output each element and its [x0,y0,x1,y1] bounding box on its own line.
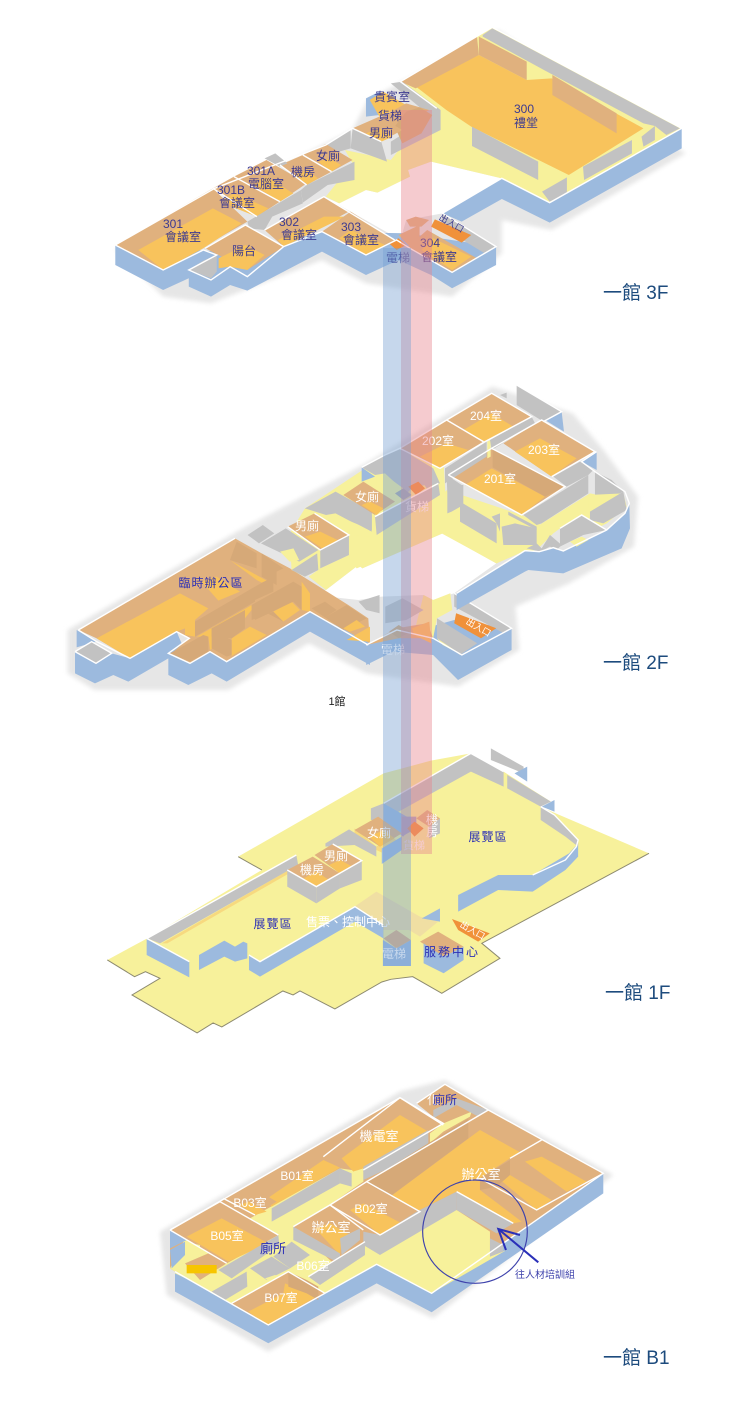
labels: 1F rooms: 機 [426,812,438,827]
labels: 1F rooms: 服務中心 [424,944,480,959]
labels: B1 rooms: 機電室 [359,1129,399,1144]
labels: 3F rooms: 貨梯 [378,109,402,123]
labels: 3F rooms: 電腦室 [248,176,284,191]
labels: B1 rooms: 化 [427,1093,439,1107]
labels: 3F rooms: 會議室 [343,232,379,247]
labels: 2F rooms: 貨梯 [405,500,429,514]
labels: B1 rooms: B06室 [296,1258,330,1273]
arrow to training group [498,1229,538,1262]
labels: 3F rooms: 電梯 [386,251,410,265]
labels: 3F rooms: 禮堂 [514,116,538,130]
floor plan: B1 [160,1080,613,1352]
labels: B1 rooms: B02室 [354,1201,388,1216]
heading: 一館 B1: 一館 B1 [603,1347,670,1369]
labels: 2F rooms: 臨時辦公區 [178,576,244,590]
labels: 1F rooms: 男廁 [324,848,348,863]
labels: 3F rooms: 陽台 [232,243,256,258]
labels: 3F rooms: 會議室 [219,195,255,210]
labels: 3F rooms: 301 [163,217,183,231]
labels: 2F rooms: 1館 [328,694,346,708]
labels: 3F rooms: 機房 [291,164,315,179]
labels: 3F rooms: 會議室 [281,227,317,242]
labels: 2F rooms: 201室 [484,471,516,486]
labels: 2F rooms: 電梯 [381,643,405,657]
labels: 3F rooms: 會議室 [421,249,457,264]
elevator column: freight [401,110,432,854]
labels: 1F rooms: 展覽區 [253,917,293,931]
labels: B1 rooms: 廁所 [433,1092,457,1107]
labels: 1F rooms: 機房 [300,862,324,877]
labels: B1 rooms: B07室 [264,1290,298,1305]
heading: 一館 3F: 一館 3F [603,282,668,304]
labels: 1F rooms: 展覽區 [468,830,508,844]
labels: 2F rooms: 女廁 [355,489,379,504]
labels: 3F rooms: 303 [341,220,361,234]
labels: 1F rooms: 貨梯 [403,838,425,852]
labels: 2F rooms [178,408,560,708]
labels: 3F rooms: 貴賓室 [374,89,410,104]
labels: 3F rooms: 302 [279,215,299,229]
labels: 3F rooms: 301A [247,164,275,178]
labels: B1 rooms: B03室 [233,1195,267,1210]
labels: 1F rooms: 房 [426,825,438,839]
heading: 一館 2F: 一館 2F [603,652,668,674]
labels: 3F rooms [163,89,538,265]
labels: B1 rooms: 往人材培訓組 [515,1268,575,1281]
labels: 1F rooms [253,812,508,961]
floor plan: 2F [68,385,638,690]
labels: B1 rooms: 辦公室 [311,1220,351,1235]
labels: 3F rooms: 301B [217,183,245,197]
labels: B1 rooms: 廁所 [260,1241,286,1256]
labels: 3F rooms: 出入口 [437,211,466,234]
heading: 一館 1F: 一館 1F [605,982,670,1004]
labels: 2F rooms: 男廁 [295,518,319,533]
labels: 1F rooms: 出入口 [458,918,487,941]
labels: B1 rooms: B05室 [210,1228,244,1243]
labels: 2F rooms: 出入口 [464,615,493,638]
labels: B1 rooms [210,1092,575,1305]
labels: 1F rooms: 電梯 [382,947,406,961]
labels: 2F rooms: 202室 [422,433,454,448]
labels: 2F rooms: 204室 [470,408,502,423]
labels: 3F rooms: 會議室 [165,229,201,244]
floor plan: 1F [107,748,649,1033]
floor plan: 3F [115,27,686,303]
labels: 1F rooms: 售票、控制中心 [306,914,390,929]
labels: 3F rooms: 男廁 [369,125,393,140]
labels: 1F rooms: 女廁 [367,825,391,840]
labels: B1 rooms: B01室 [280,1168,314,1183]
labels: B1 rooms: 辦公室 [461,1167,501,1182]
labels: 3F rooms: 女廁 [316,148,340,163]
labels: 3F rooms: 304 [420,236,440,250]
labels: 3F rooms: 300 [514,102,534,116]
labels: 2F rooms: 203室 [528,442,560,457]
elevator column: passenger [383,248,411,966]
circle marker [423,1180,527,1283]
